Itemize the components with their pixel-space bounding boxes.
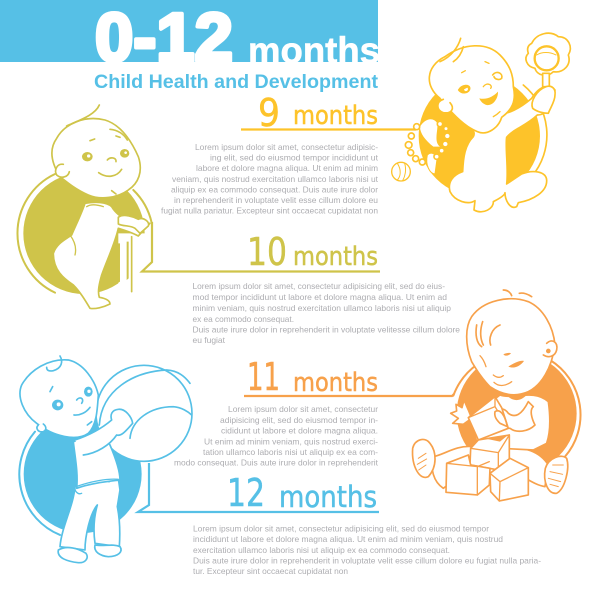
heading: 11 months — [247, 355, 378, 399]
shoes — [58, 548, 87, 563]
head — [467, 299, 555, 395]
heading: 11 months: 11 — [247, 355, 280, 399]
illustration: baby with blocks, 11 months — [413, 290, 581, 501]
connector line: 10 months — [142, 222, 380, 272]
connector line: 12 months — [138, 463, 379, 512]
middle cube — [470, 435, 509, 470]
text block: 10 months: Duis aute irure dolor in reprehenderit in voluptate velitesse cillum dolore — [192, 324, 460, 334]
text block: 9 months: fugiat nulla pariatur. Excepteur sint occaecat cupidatat non — [161, 206, 378, 216]
ear — [37, 424, 46, 432]
face — [82, 152, 93, 161]
illustration: baby with ball, 12 months — [19, 356, 192, 563]
ear — [438, 99, 452, 113]
heading: 9 months: months — [293, 101, 378, 131]
subtitle: Child Health and Development — [94, 71, 379, 93]
text block: 9 months: aliquip ex ea commodo consequat. Duis aute irure dolor — [171, 184, 378, 194]
text block: 10 months — [192, 281, 460, 345]
bottom left cube — [446, 455, 490, 495]
text block: 11 months: adipisicing elit, sed do eiusmod tempor in- — [220, 415, 378, 425]
heading: 9 months — [258, 91, 378, 135]
small rattle — [392, 162, 410, 181]
body — [449, 86, 555, 212]
flower rattle — [526, 33, 570, 75]
heading: 10 months: months — [293, 242, 378, 272]
illustration: baby with rattle, 9 months — [392, 33, 570, 212]
dress — [470, 395, 550, 450]
header banner — [0, 0, 378, 62]
heading: 11 months: months — [293, 368, 378, 398]
face — [52, 400, 63, 410]
head — [20, 360, 98, 437]
text block: 10 months: ex ea commodo consequat. — [192, 314, 294, 324]
text block: 11 months: Lorem ipsum dolor sit amet, consectetur — [228, 404, 378, 414]
crib bars — [118, 233, 147, 300]
ear — [543, 341, 557, 357]
text block: 9 months: labore et dolore magna aliqua. Ut enim ad minim — [196, 163, 378, 173]
title: 0-12 months: 0-12 — [95, 0, 233, 76]
held cube — [468, 397, 508, 440]
left hand — [451, 400, 472, 424]
heading: 12 months — [227, 471, 377, 515]
text block: 11 months: Ut enim ad minim veniam, quis nostrud exerci- — [204, 436, 378, 446]
arm — [495, 402, 535, 431]
text block: 9 months — [161, 142, 379, 216]
head — [52, 119, 140, 198]
text block: 9 months: in reprehenderit in voluptate velit esse cillum dolore eu — [174, 195, 378, 205]
ear — [56, 164, 69, 177]
text block: 10 months: eu fugiat — [192, 335, 226, 345]
heading: 12 months: 12 — [227, 471, 265, 515]
left shoe — [413, 440, 435, 477]
legs — [432, 446, 548, 488]
illustration: standing baby, 10 months — [17, 105, 152, 309]
bib wedge — [445, 123, 475, 137]
text block: 12 months: Duis aute irure dolor in reprehenderit in voluptate velit esse cillum dolore eu fugiat nulla paria- — [193, 556, 541, 566]
heading: 9 months: 9 — [258, 91, 280, 135]
text block: 10 months: mod tempor incididunt ut labore et dolore magna aliqua. Ut enim ad — [192, 292, 447, 302]
head — [429, 46, 514, 133]
right shoe — [545, 456, 568, 493]
connector line: 9 months — [241, 128, 416, 131]
ball — [96, 365, 192, 461]
legs — [60, 478, 120, 550]
heading: 10 months: 10 — [247, 230, 287, 274]
face — [479, 92, 498, 105]
arm and beads — [420, 119, 440, 147]
text block: 11 months — [174, 404, 379, 468]
text block: 12 months: exercitation ullamco laboris nisi ut aliquip ex ea commodo consequat. — [193, 545, 450, 555]
connector line: 11 months — [244, 394, 454, 396]
text block: 12 months: tur. Excepteur sint occaecat cupidatat non — [193, 566, 348, 576]
face — [503, 353, 524, 368]
title: 0-12 months: months — [248, 30, 380, 71]
heading: 10 months — [247, 230, 378, 274]
arm — [75, 409, 133, 455]
shirt — [73, 437, 120, 488]
text block: 12 months — [193, 524, 541, 576]
body — [53, 202, 150, 309]
text block: 11 months: modo consequat. Duis aute irure dolor in reprehenderit — [174, 458, 379, 468]
text block: 9 months: veniam, quis nostrud exercitation ullamco laboris nisi ut — [172, 174, 379, 184]
text block: 10 months: minim veniam, quis nostrud exercitation ullamco laboris nisi ut aliquip — [192, 303, 451, 313]
text block: 11 months: tation ullamco laboris nisi ut aliquip ex ea com- — [203, 447, 378, 457]
heading: 12 months: months — [279, 480, 377, 514]
text block: 12 months: Lorem ipsum dolor sit amet, consectetur adipisicing elit, sed do eiusmod tempor — [193, 524, 489, 534]
text block: 11 months: cididunt ut labore et dolore magna aliqua. — [221, 426, 378, 436]
hand — [118, 215, 149, 233]
text block: 12 months: incididunt ut labore et dolore magna aliqua. Ut enim ad minim veniam, quis nostrud — [193, 534, 503, 544]
text block: 9 months: ing elit, sed do eiusmod tempor incididunt ut — [210, 153, 379, 163]
fingers — [495, 411, 507, 427]
bottom right cube — [490, 458, 528, 501]
text block: 10 months: Lorem ipsum dolor sit amet, consectetur adipisicing elit, sed do eius- — [192, 281, 445, 291]
text block: 9 months: Lorem ipsum dolor sit amet, consectetur adipisic- — [195, 142, 378, 152]
title: 0-12 months — [96, 11, 378, 62]
